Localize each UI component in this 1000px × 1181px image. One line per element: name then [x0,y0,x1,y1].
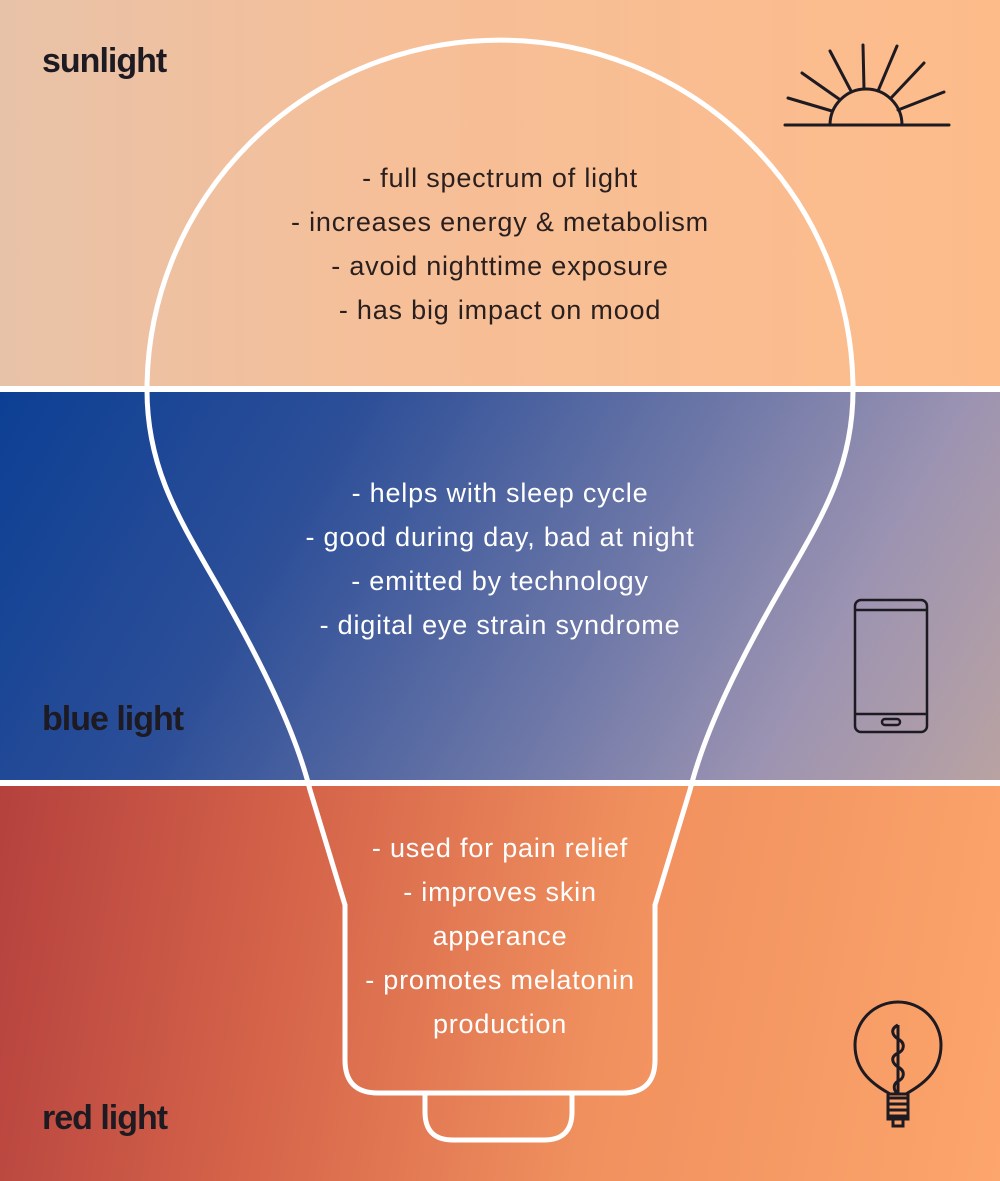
text: red light facts: apperance [433,921,567,951]
text: blue light facts: - good during day, bad at night [305,522,695,552]
text: blue light facts: - helps with sleep cycle [352,478,648,508]
text: blue light facts [305,478,695,640]
text: red light facts: - used for pain relief [372,833,628,863]
text: blue light facts: - digital eye strain syndrome [320,610,680,640]
panel: red light background [0,786,1000,1181]
text: red light facts: - promotes melatonin [365,965,635,995]
icon: phone [854,598,928,734]
text: red light facts: - improves skin [403,877,597,907]
text: sunlight facts: - full spectrum of light [362,163,638,193]
heading: blue light: blue light [42,700,183,738]
text: blue light facts: - emitted by technology [351,566,649,596]
icon: lightbulb [854,1000,942,1128]
text: sunlight facts: - increases energy & metabolism [291,207,709,237]
text: sunlight facts: - has big impact on mood [339,295,661,325]
text: sunlight facts: - avoid nighttime exposure [331,251,669,281]
text: sunlight facts [291,163,709,325]
text: red light facts [365,833,635,1039]
heading: sunlight: sunlight [42,42,166,80]
icon: sun [784,44,950,126]
heading: red light: red light [42,1099,167,1137]
text: red light facts: production [433,1009,567,1039]
panel: sunlight background [0,0,1000,387]
panel: blue light background [0,392,1000,780]
